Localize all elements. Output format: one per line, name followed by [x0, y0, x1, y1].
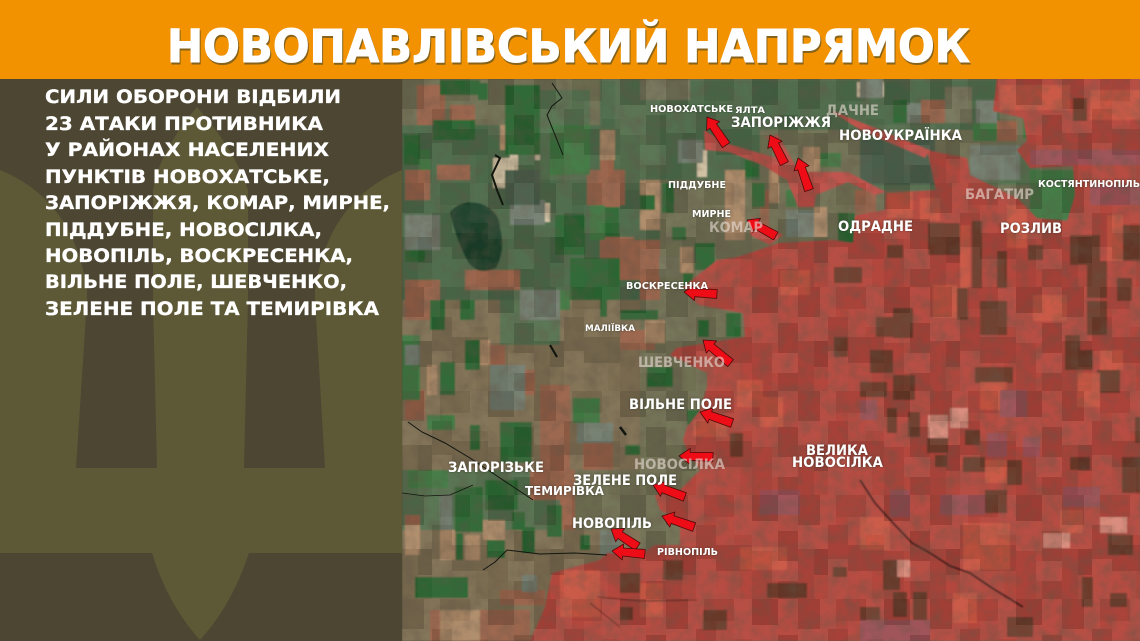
field texture overlay — [402, 79, 1140, 641]
text block: summary: ЗАПОРІЖЖЯ, КОМАР, МИРНЕ, — [45, 193, 390, 214]
map place labels: ПІДДУБНЕ — [668, 180, 726, 191]
text block: summary: НОВОПІЛЬ, ВОСКРЕСЕНКА, — [45, 246, 353, 267]
satellite map — [402, 78, 1140, 641]
arrow: Запоріжжя 2 — [794, 158, 814, 192]
map place labels: ВОСКРЕСЕНКА — [626, 281, 708, 292]
text block: summary: 23 АТАКИ ПРОТИВНИКА — [45, 114, 324, 135]
arrow: Рівнопіль — [611, 543, 646, 562]
map place labels: МАЛІЇВКА — [585, 323, 635, 334]
arrow: Новосілка — [679, 448, 713, 465]
map place labels: НОВОПІЛЬ — [572, 516, 652, 532]
map land fields — [402, 78, 1140, 641]
text block: summary: У РАЙОНАХ НАСЕЛЕНИХ — [45, 139, 329, 161]
map place labels: ЗЕЛЕНЕ ПОЛЕ — [573, 473, 677, 489]
text block: summary: СИЛИ ОБОРОНИ ВІДБИЛИ — [45, 87, 341, 108]
map place labels: ТЕМИРІВКА — [525, 484, 605, 498]
river in occupied zone — [860, 480, 1023, 607]
text block: summary: ПІДДУБНЕ, НОВОСІЛКА, — [45, 220, 322, 241]
map place labels: МИРНЕ — [692, 209, 731, 220]
map place labels: ЯЛТА — [735, 106, 765, 116]
arrow: Запоріжжя 1 — [767, 134, 789, 166]
left panel with trident emblem — [0, 79, 402, 641]
icon: trident emblem — [0, 107, 402, 640]
arrow: Воскресенка — [684, 284, 717, 302]
arrow: Комар — [746, 218, 778, 240]
map place labels: КОМАР — [709, 220, 763, 236]
arrow: Новопіль east — [662, 512, 696, 532]
text block: summary: ПУНКТІВ НОВОХАТСЬКЕ, — [45, 167, 330, 188]
blotchy ground texture — [402, 79, 1140, 641]
text block: summary: ВІЛЬНЕ ПОЛЕ, ШЕВЧЕНКО, — [45, 272, 347, 293]
rivers on the land side — [402, 83, 626, 570]
map place labels: ВЕЛИКА — [806, 443, 869, 459]
arrow: Новохатське — [706, 116, 730, 148]
map place labels: ЗАПОРІЗЬКЕ — [448, 460, 544, 476]
map place labels: НОВОСІЛКА — [634, 457, 726, 473]
text block: summary — [45, 87, 390, 320]
forest — [450, 202, 502, 271]
header bar — [0, 0, 1140, 79]
map place labels: РОЗЛИВ — [1000, 221, 1062, 237]
map place labels: НОВОСІЛКА — [792, 455, 884, 471]
occupied territory (red overlay) — [530, 78, 1140, 641]
title: НОВОПАВЛІВСЬКИЙ НАПРЯМОК — [167, 20, 970, 73]
arrow: Зелене Поле — [652, 482, 687, 502]
attack arrows — [607, 113, 817, 562]
map place labels — [448, 103, 1140, 558]
map place labels: ОДРАДНЕ — [838, 219, 913, 235]
map place labels: НОВОХАТСЬКЕ — [650, 104, 733, 115]
arrow: Новопіль south — [610, 528, 640, 548]
map place labels: ВІЛЬНЕ ПОЛЕ — [629, 397, 732, 413]
arrow: Шевченко — [702, 340, 734, 367]
text block: summary: ЗЕЛЕНЕ ПОЛЕ ТА ТЕМИРІВКА — [45, 299, 380, 320]
map place labels: РІВНОПІЛЬ — [657, 547, 718, 558]
map place labels: ШЕВЧЕНКО — [638, 355, 725, 371]
map place labels: БАГАТИР — [965, 187, 1034, 203]
map place labels: НОВОУКРАЇНКА — [839, 127, 963, 144]
map place labels: ДАЧНЕ — [826, 103, 879, 119]
arrow: Вільне Поле — [700, 408, 734, 428]
map place labels: ЗАПОРІЖЖЯ — [731, 115, 831, 131]
